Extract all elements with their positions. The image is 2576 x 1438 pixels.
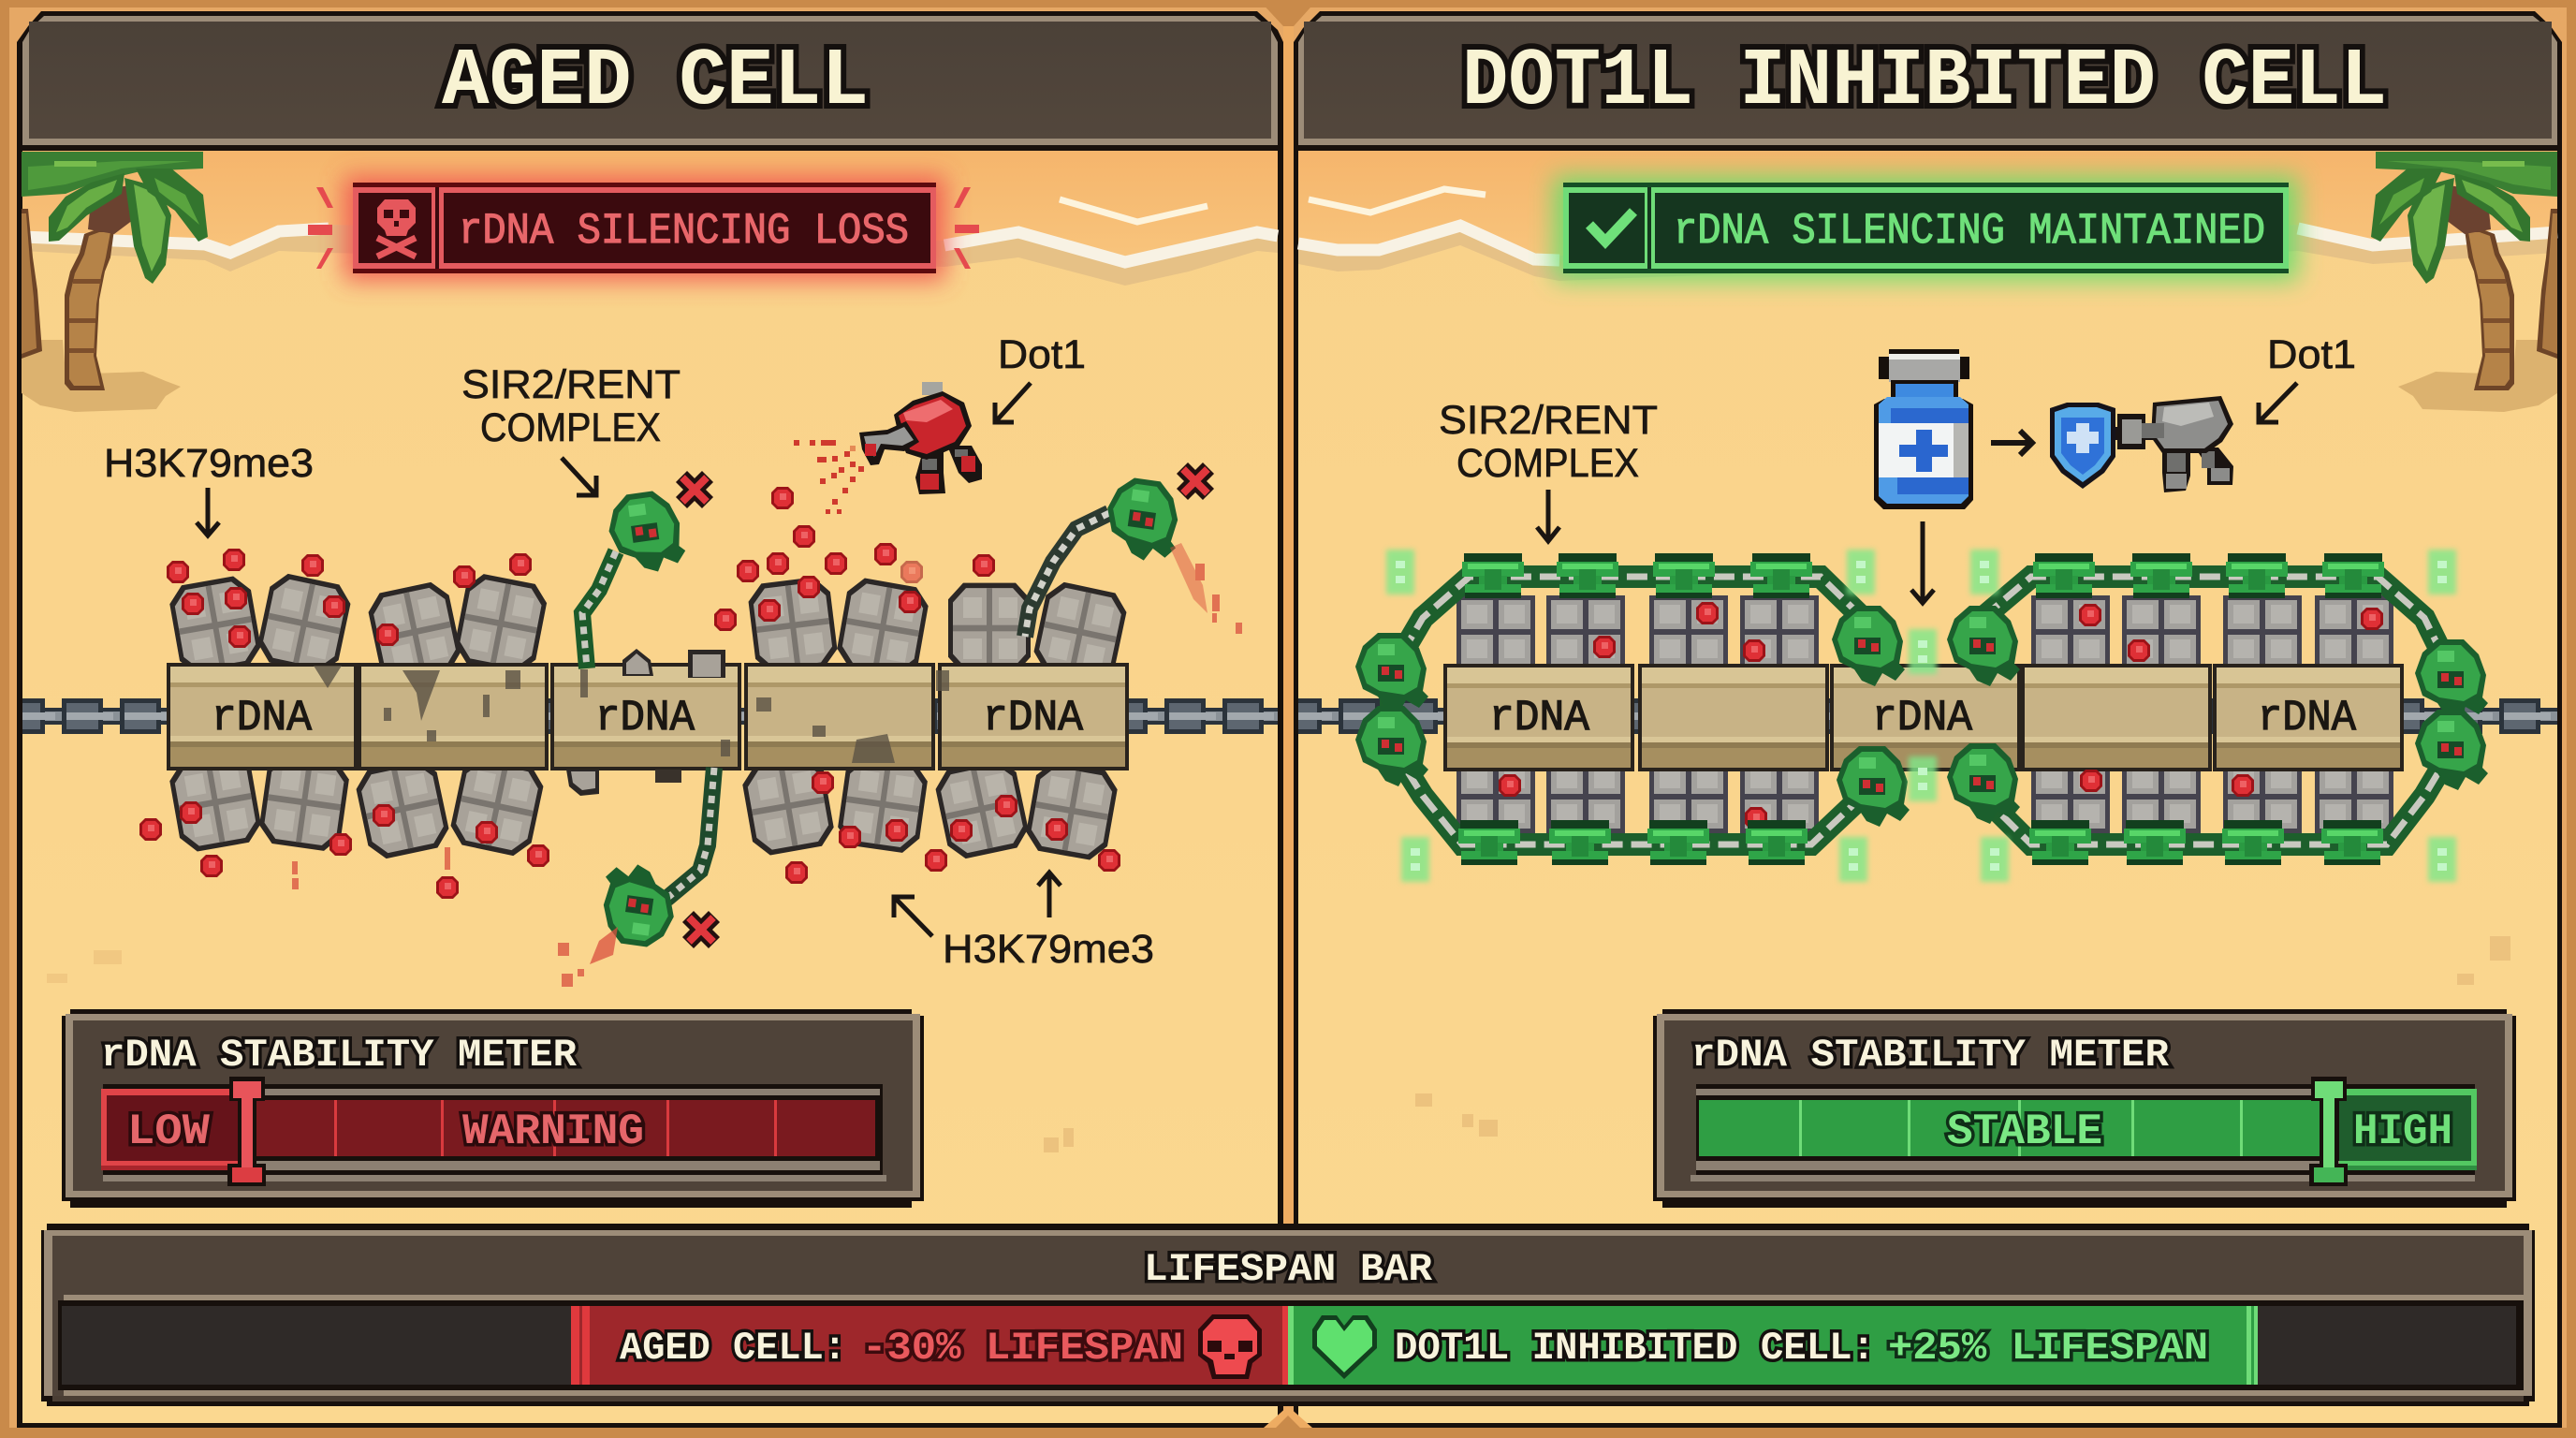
stability meter: high bbox=[1653, 1009, 2516, 1208]
warning label: WARNING bbox=[462, 1108, 644, 1156]
block damage bbox=[314, 666, 949, 763]
enzyme: active red Dot1 bbox=[859, 382, 982, 494]
alert sparks bbox=[308, 187, 979, 269]
text: rDNA: rDNA bbox=[2258, 694, 2356, 742]
detached SIR2 complex 1 bbox=[582, 477, 708, 668]
text: rDNA: rDNA bbox=[595, 694, 695, 742]
meter title: rDNA STABILITY METER bbox=[1691, 1033, 2170, 1078]
icon: shield blocking Dot1 bbox=[2050, 403, 2115, 489]
rDNA segments right bbox=[1443, 664, 2404, 771]
upper histones: intact bbox=[1456, 595, 2393, 668]
text: rDNA: rDNA bbox=[1872, 694, 1972, 742]
stable label: STABLE bbox=[1947, 1108, 2102, 1156]
text: minus 30 percent: -30% LIFESPAN bbox=[862, 1326, 1183, 1371]
text: plus 25 percent: +25% LIFESPAN bbox=[1888, 1326, 2208, 1371]
low zone bbox=[101, 1089, 238, 1170]
bar: aged cell bbox=[571, 1306, 1288, 1385]
panel: lifespan bar bbox=[41, 1224, 2535, 1406]
arrow: up to histone bbox=[1038, 873, 1061, 917]
meter track bbox=[1690, 1084, 2475, 1181]
palm tree bbox=[2371, 152, 2557, 412]
label: SIR2/RENT complex: SIR2/RENT bbox=[461, 362, 681, 407]
few remaining methyl marks bbox=[1499, 602, 2383, 829]
label: SIR2/RENT complex bbox=[461, 362, 681, 450]
arrow: to SIR2 bbox=[1537, 490, 1559, 541]
header: DOT1L inhibited cell bbox=[1294, 11, 2562, 151]
protective sparkles bbox=[1386, 550, 2456, 882]
label: SIR2/RENT complex: SIR2/RENT bbox=[1439, 398, 1658, 443]
arrow: to Dot1 bbox=[2259, 383, 2297, 422]
palm tree bbox=[22, 152, 208, 412]
arrow: bottle to rDNA bbox=[1911, 521, 1934, 603]
silencing chain loop right bbox=[1947, 553, 2488, 865]
high zone: HIGH bbox=[2353, 1108, 2452, 1156]
main chain left bbox=[22, 698, 1278, 734]
panel background: beach bbox=[17, 140, 1283, 1429]
broken rubble bbox=[566, 649, 725, 796]
heading: aged cell: AGED CELL bbox=[442, 36, 869, 127]
icon: inhibitor bottle bbox=[1874, 349, 1973, 509]
enzyme: inactive grey Dot1 bbox=[2114, 396, 2233, 492]
header: aged cell bbox=[17, 11, 1283, 151]
main chain right bbox=[1298, 698, 2557, 734]
panel: DOT1L inhibited cell bbox=[1294, 11, 2562, 1429]
silencing chain loop left bbox=[1355, 553, 1910, 865]
arrow: bottle to shield bbox=[1991, 431, 2032, 455]
icon: skull bbox=[1198, 1314, 1262, 1379]
meter title: rDNA STABILITY METER bbox=[101, 1033, 578, 1078]
label: H3K79me3 bottom: H3K79me3 bbox=[943, 927, 1154, 972]
text: aged cell: AGED CELL: bbox=[620, 1326, 846, 1371]
label: Dot1: Dot1 bbox=[2267, 332, 2356, 377]
label: SIR2/RENT complex bbox=[1439, 398, 1658, 486]
lower histones: damaged bbox=[167, 751, 1120, 862]
text: DOT1L inhibited cell: DOT1L INHIBITED CELL: bbox=[1395, 1326, 1875, 1371]
panel: aged cell bbox=[17, 11, 1283, 1429]
meter track bbox=[103, 1084, 886, 1181]
text: rDNA: rDNA bbox=[1489, 694, 1589, 742]
detached SIR2 complex 3 bbox=[597, 768, 714, 950]
bar: DOT1L inhibited cell bbox=[1288, 1306, 2258, 1385]
status banner: rDNA silencing loss bbox=[308, 176, 979, 281]
heading: DOT1L inhibited cell: DOT1L INHIBITED CELL bbox=[1462, 36, 2387, 127]
panel background: beach bbox=[1294, 140, 2562, 1429]
arrow: to top histones bbox=[197, 488, 219, 536]
icon: heart bbox=[1312, 1315, 1377, 1379]
lower histones: intact bbox=[1456, 760, 2393, 833]
slider handle bbox=[2309, 1077, 2348, 1186]
label: SIR2/RENT complex: COMPLEX bbox=[1456, 441, 1639, 486]
low zone: LOW bbox=[127, 1108, 210, 1156]
centre divider strip bbox=[1283, 0, 1294, 1224]
heading: lifespan bar: LIFESPAN BAR bbox=[1144, 1247, 1433, 1292]
arrow: to Dot1 bbox=[995, 383, 1031, 422]
icon: check mark bbox=[1589, 212, 1633, 242]
text: rDNA: rDNA bbox=[983, 694, 1083, 742]
label: Dot1: Dot1 bbox=[998, 332, 1086, 377]
high zone bbox=[2339, 1089, 2477, 1170]
text: rDNA: rDNA bbox=[212, 694, 312, 742]
debris smears bbox=[292, 543, 1242, 987]
label: SIR2/RENT complex: COMPLEX bbox=[480, 405, 661, 450]
arrow: to SIR2 bbox=[562, 458, 596, 495]
banner text: rDNA SILENCING MAINTAINED bbox=[1674, 207, 2265, 256]
rDNA segments left bbox=[167, 663, 1129, 770]
banner text: rDNA SILENCING LOSS bbox=[459, 207, 909, 256]
arrow: diagonal to histone bbox=[894, 897, 932, 936]
label: H3K79me3 top: H3K79me3 bbox=[104, 441, 314, 486]
status banner: rDNA silencing maintained bbox=[1554, 176, 2298, 281]
slider handle bbox=[227, 1077, 266, 1186]
stability meter: low bbox=[62, 1009, 924, 1208]
bar track bbox=[58, 1295, 2527, 1396]
detached SIR2 complex 2 bbox=[1025, 468, 1208, 637]
spray particles bbox=[794, 440, 864, 514]
upper histones: damaged bbox=[167, 571, 1130, 684]
icon: skull and crossbones bbox=[377, 199, 416, 257]
H3K79me3 methyl marks bbox=[139, 487, 1120, 899]
